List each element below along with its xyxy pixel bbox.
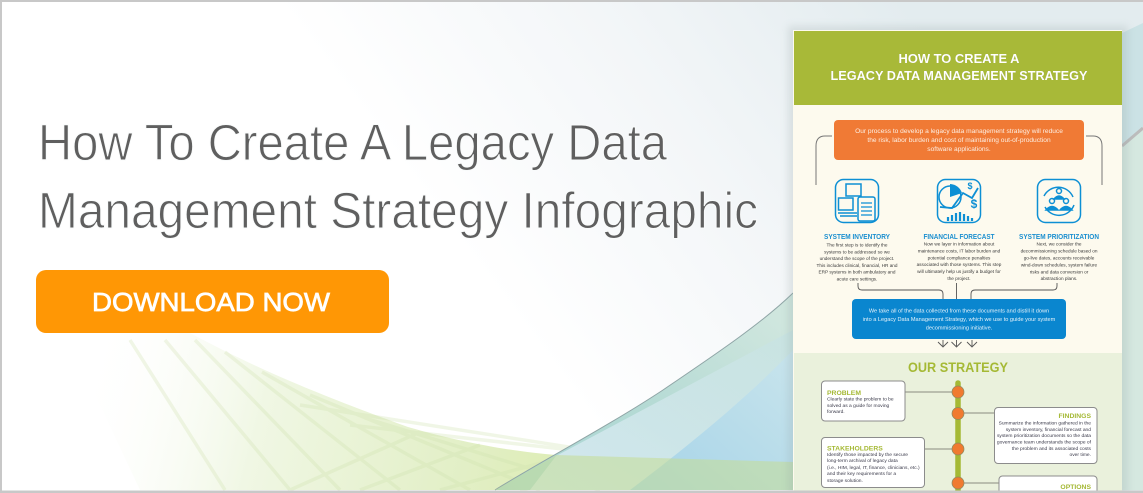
card: stakeholders: Identify those impacted by the secure — [827, 452, 908, 458]
card: stakeholders: storage solution. — [827, 478, 863, 484]
card: stakeholders: and their key requirements for a — [827, 471, 896, 477]
icon: financial forecast — [938, 180, 980, 222]
button: download now — [36, 270, 389, 333]
icon: system inventory — [836, 180, 878, 222]
column: financial forecast: associated with those systems. This step — [917, 262, 1002, 267]
column: financial forecast: FINANCIAL FORECAST — [924, 232, 995, 241]
column: system inventory: This includes clinical, financial, HR and — [816, 263, 898, 268]
intro callout: software applications. — [927, 146, 991, 153]
card: findings: over time. — [1070, 452, 1091, 458]
column: system inventory — [816, 232, 898, 282]
card: problem: Clearly state the problem to be — [827, 396, 894, 402]
column: system inventory: SYSTEM INVENTORY — [824, 232, 890, 241]
intro callout — [834, 120, 1084, 160]
icon: financial forecast: $ — [967, 181, 973, 191]
decorative green wave — [66, 333, 793, 490]
button: download now: DOWNLOAD NOW — [92, 287, 330, 317]
summary callout: into a Legacy Data Management Strategy, which we use to guide your system — [863, 317, 1056, 323]
card: findings — [994, 408, 1097, 464]
column: financial forecast: Now we layer in information about — [924, 242, 995, 246]
column: financial forecast: the project. — [947, 276, 971, 281]
card: stakeholders: (i.e., HIM, legal, IT, finance, clinicians, etc.) — [827, 465, 920, 471]
column: financial forecast: will ultimately help us justify a budget for — [917, 269, 1001, 274]
card: findings: system inventory, financial forecast and — [1006, 427, 1091, 433]
bottom frame edge — [0, 490, 1143, 493]
card: findings: Summarize the information gathered in the — [999, 420, 1091, 426]
column: system inventory: systems to be addressed so we — [824, 250, 890, 254]
column: system prioritization: Next, we consider the — [1036, 242, 1082, 246]
column: financial forecast: maintenance costs, IT labor burden and — [918, 248, 1001, 254]
column: system prioritization: risks and data conversion or — [1030, 270, 1089, 274]
column: system prioritization: decommissioning schedule based on — [1021, 248, 1098, 254]
column: system inventory: ERP systems in both ambulatory and — [818, 270, 896, 274]
column: system inventory: understand the scope of the project. — [820, 256, 894, 261]
column: financial forecast: potential compliance penalties — [928, 256, 991, 260]
timeline — [905, 383, 999, 493]
heading: our strategy: OUR STRATEGY — [908, 360, 1008, 375]
icon: system prioritization — [1038, 180, 1080, 222]
decorative teal wave — [495, 23, 1143, 490]
intro callout: Our process to develop a legacy data management strategy will reduce — [855, 128, 1063, 135]
infographic preview — [788, 26, 1128, 493]
column: system inventory: The first step is to identify the — [827, 242, 888, 248]
card: stakeholders: long-term archival of legacy data — [827, 458, 898, 464]
column: system prioritization — [1019, 232, 1099, 281]
summary callout: We take all of the data collected from these documents and distill it down — [869, 308, 1049, 314]
card: stakeholders — [822, 438, 924, 488]
bracket connectors — [816, 136, 1102, 185]
card: problem: PROBLEM — [827, 390, 861, 397]
card: findings: FINDINGS — [1059, 413, 1091, 420]
card: options — [999, 476, 1097, 493]
card: problem — [822, 381, 905, 421]
card: findings: governance team understands the scope of — [997, 440, 1092, 446]
card: findings: system prioritization documents so the data — [997, 433, 1091, 439]
title: How To Create A Legacy Data — [38, 114, 668, 171]
column: system prioritization: go-live dates, accounts receivable — [1024, 256, 1095, 260]
strategy section background — [794, 353, 1122, 493]
card: stakeholders: STAKEHOLDERS — [827, 446, 883, 452]
summary callout — [852, 299, 1066, 339]
arrows down — [938, 340, 977, 347]
title — [38, 114, 758, 239]
card: problem: forward. — [827, 409, 845, 415]
column: system prioritization: wind-down schedules, system failure — [1021, 262, 1098, 268]
icon: financial forecast: $ — [971, 197, 978, 211]
card: findings: the problem and its associated costs — [1012, 446, 1092, 452]
summary callout: decommissioning initiative. — [926, 326, 993, 332]
card: options: OPTIONS — [1060, 484, 1091, 491]
intro callout: the risk, labor burden and cost of maintaining out-of-production — [867, 137, 1051, 144]
column: system inventory: acute care settings. — [837, 276, 877, 282]
column: system prioritization: abstraction plans. — [1041, 276, 1077, 281]
title: Management Strategy Infographic — [38, 182, 758, 239]
column: financial forecast — [917, 232, 1002, 281]
header band — [794, 31, 1122, 105]
header band: LEGACY DATA MANAGEMENT STRATEGY — [830, 69, 1088, 83]
card: problem: solved as a guide for moving — [827, 403, 890, 409]
header band: HOW TO CREATE A — [898, 52, 1020, 66]
connectors to summary — [858, 283, 1057, 299]
column: system prioritization: SYSTEM PRIORITIZATION — [1019, 232, 1099, 241]
